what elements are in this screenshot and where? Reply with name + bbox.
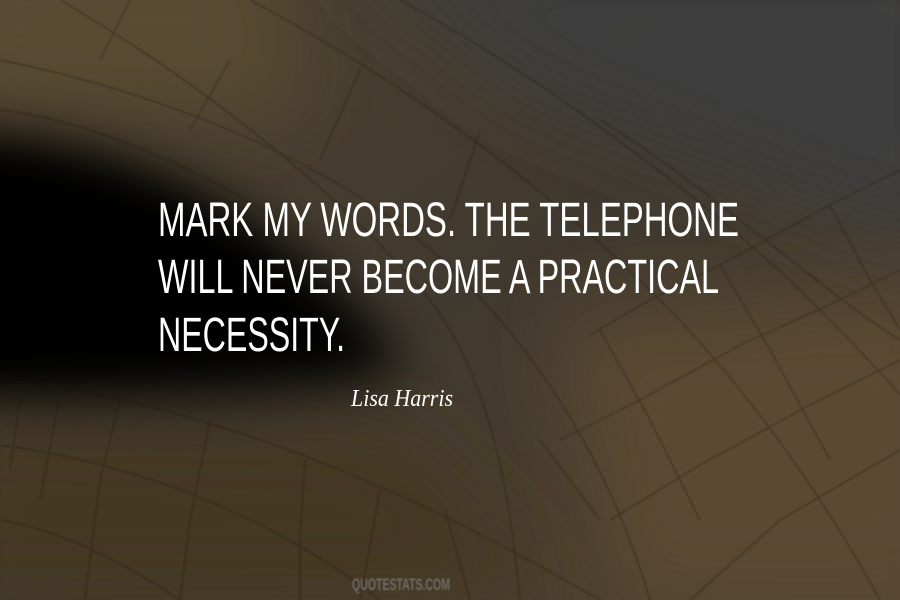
quote line 3: NECESSITY. (158, 309, 345, 362)
quote text (158, 194, 739, 362)
author name: Lisa Harris (350, 386, 453, 412)
watermark: QUOTESTATS.COM (352, 575, 450, 594)
